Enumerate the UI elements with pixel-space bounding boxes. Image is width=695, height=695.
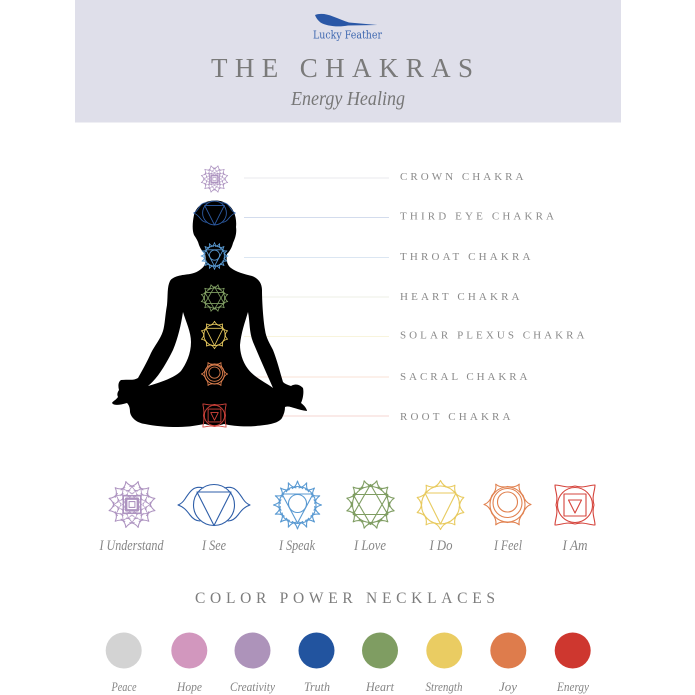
label: third eye chakra: THIRD EYE CHAKRA (400, 210, 554, 222)
swatch: Strength: Strength (426, 679, 462, 694)
header banner (75, 0, 621, 122)
swatch: Strength (426, 632, 462, 694)
swatch: Truth: Truth (304, 679, 330, 694)
swatch: Hope (171, 632, 207, 694)
logo: Lucky Feather: Lucky Feather (313, 28, 383, 42)
swatch: Energy: Energy (556, 679, 589, 694)
swatch: Creativity (230, 632, 275, 694)
icon: large throat chakra (273, 481, 322, 529)
logo: Lucky Feather (313, 14, 383, 42)
swatch: Peace: Peace (111, 679, 137, 694)
caption: I Understand: I Understand (99, 538, 164, 554)
icon: large third eye chakra (178, 484, 250, 526)
title: THE CHAKRAS (211, 53, 473, 83)
caption: I See: I See (201, 538, 226, 554)
label: sacral chakra: SACRAL CHAKRA (400, 371, 528, 383)
caption: I Love: I Love (353, 538, 386, 554)
label: root chakra: ROOT CHAKRA (400, 411, 511, 423)
caption: I Speak: I Speak (278, 538, 315, 554)
swatch: Heart (362, 632, 398, 694)
swatch: Energy (555, 632, 591, 694)
label: throat chakra: THROAT CHAKRA (400, 251, 531, 263)
meditating silhouette (112, 200, 307, 427)
swatch: Truth (298, 632, 334, 694)
heading: color power necklaces: COLOR POWER NECKLACES (195, 590, 495, 607)
caption: I Am: I Am (562, 538, 588, 554)
icon: small root chakra (203, 404, 226, 427)
guide lines (244, 178, 389, 416)
swatch: Hope: Hope (176, 679, 202, 694)
icon: large sacral chakra (484, 480, 531, 529)
swatch: Joy: Joy (499, 679, 517, 694)
caption: I Do: I Do (429, 538, 452, 554)
caption: I Feel: I Feel (493, 538, 522, 554)
icon: small crown chakra (200, 165, 229, 193)
subtitle: Energy Healing (290, 88, 405, 110)
swatch: Creativity: Creativity (230, 679, 275, 694)
icon: small throat chakra (201, 242, 228, 270)
label: solar plexus chakra: SOLAR PLEXUS CHAKRA (400, 330, 585, 342)
icon: large root chakra (555, 485, 595, 525)
label: heart chakra: HEART CHAKRA (400, 291, 520, 303)
label: crown chakra: CROWN CHAKRA (400, 171, 524, 183)
swatch: Heart: Heart (365, 679, 394, 694)
icon: large crown chakra (107, 480, 157, 529)
icon: small heart chakra (200, 284, 229, 312)
swatch: Peace (106, 632, 142, 694)
icon: small solar plexus chakra (200, 321, 229, 349)
icon: small sacral chakra (201, 360, 228, 388)
icon: small third eye chakra (194, 201, 235, 225)
icon: large solar plexus chakra (415, 480, 466, 530)
swatch: Joy (490, 632, 526, 694)
icon: large heart chakra (345, 479, 396, 530)
